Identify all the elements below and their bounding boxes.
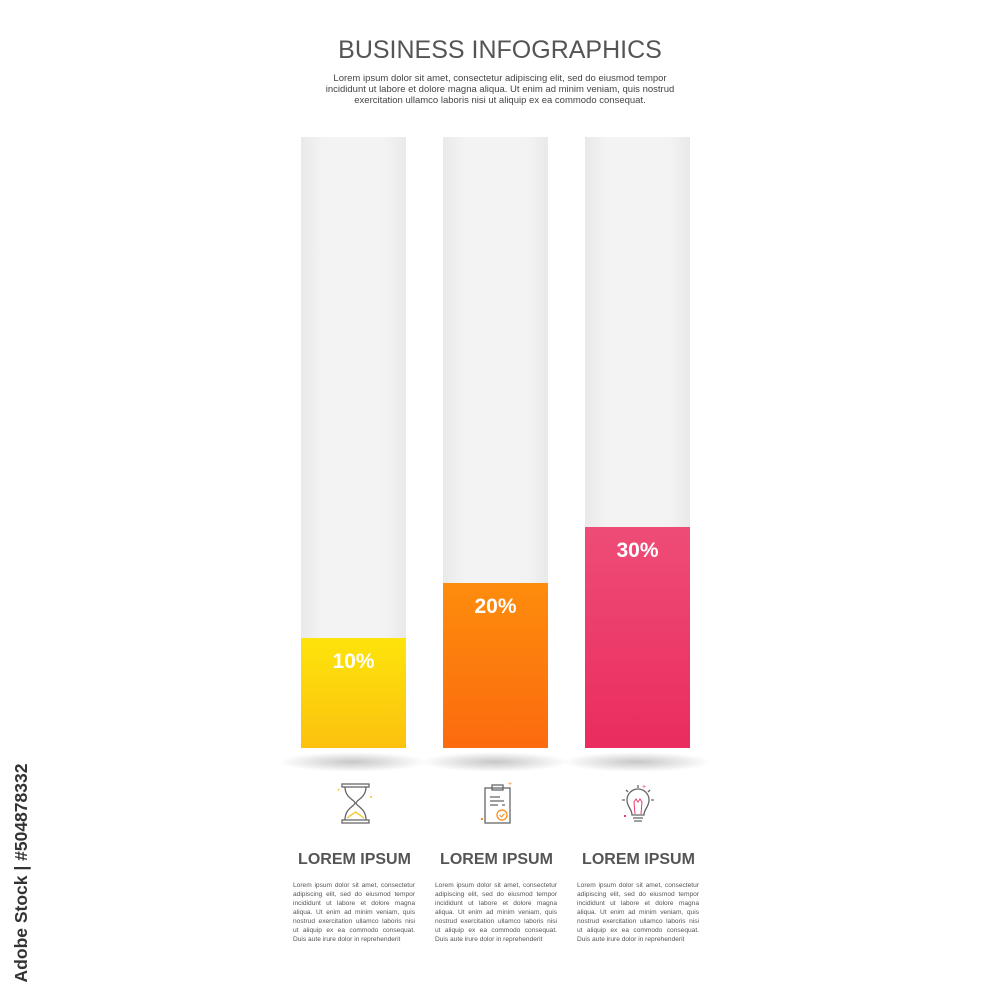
heading 2: LOREM IPSUM	[440, 851, 553, 868]
bar 2: 20%	[443, 137, 548, 748]
watermark id: Adobe Stock | #504878332	[11, 764, 31, 982]
title: BUSINESS INFOGRAPHICS	[338, 36, 662, 64]
text 3: Lorem ipsum dolor sit amet, consectetur adipiscing elit, sed do eiusmod tempor incididunt ut labore et dolore magna aliqua. Ut enim ad minim veniam, quis nostrud exercitation ullamco laboris nisi ut aliquip ex ea commodo consequat. Duis aute irure dolor in reprehenderit	[577, 882, 699, 943]
bar 2: 20%: 20%	[474, 595, 517, 618]
icon: hourglass: +	[337, 788, 341, 794]
bar 1: 10%: 10%	[332, 650, 375, 673]
icon: clipboard: +	[508, 781, 512, 788]
icon: lightbulb	[622, 784, 654, 822]
icon: hourglass	[337, 783, 372, 824]
shadow 2	[420, 752, 570, 772]
shadow 3	[562, 752, 712, 772]
icon: lightbulb: +	[642, 784, 646, 791]
bar 3: 30%	[585, 137, 690, 748]
heading 3: LOREM IPSUM	[582, 851, 695, 868]
bar 3: 30%: 30%	[616, 539, 659, 562]
text 1: Lorem ipsum dolor sit amet, consectetur adipiscing elit, sed do eiusmod tempor incididunt ut labore et dolore magna aliqua. Ut enim ad minim veniam, quis nostrud exercitation ullamco laboris nisi ut aliquip ex ea commodo consequat. Duis aute irure dolor in reprehenderit	[293, 882, 415, 943]
shadow 1	[278, 752, 428, 772]
text 2: Lorem ipsum dolor sit amet, consectetur adipiscing elit, sed do eiusmod tempor incididunt ut labore et dolore magna aliqua. Ut enim ad minim veniam, quis nostrud exercitation ullamco laboris nisi ut aliquip ex ea commodo consequat. Duis aute irure dolor in reprehenderit	[435, 882, 557, 943]
bar 1: 10%	[301, 137, 406, 748]
icon: clipboard	[481, 781, 512, 824]
subtitle: Lorem ipsum dolor sit amet, consectetur adipiscing elit, sed do eiusmod tempor incididunt ut labore et dolore magna aliqua. Ut enim ad minim veniam, quis nostrud exercitation ullamco laboris nisi ut aliquip ex ea commodo consequat.	[326, 73, 674, 106]
heading 1: LOREM IPSUM	[298, 851, 411, 868]
